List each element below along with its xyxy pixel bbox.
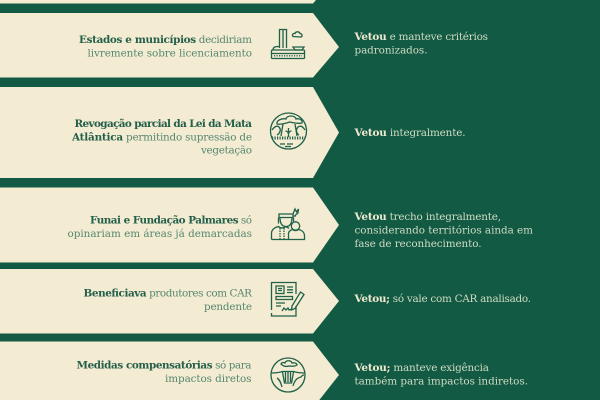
arrow panel (0, 87, 339, 178)
panel: CAR row (0, 269, 339, 334)
proposal text: livremente sobre licenciamento (88, 48, 252, 60)
response 3: Vetou trecho integralmente, (354, 211, 501, 223)
proposal text (71, 118, 252, 156)
proposal text: Beneficiava produtores com CAR (84, 288, 253, 300)
top strip: previous panel (0, 0, 316, 4)
proposal text (79, 34, 252, 60)
panel: Funai row (0, 188, 339, 262)
response 5: Vetou; manteve exigência (354, 362, 489, 374)
response 1 (354, 31, 488, 56)
proposal text: impactos diretos (165, 373, 252, 385)
proposal text: opinariam em áreas já demarcadas (68, 228, 252, 240)
proposal text: Funai e Fundação Palmares só (90, 214, 252, 226)
response 3: considerando territórios ainda em (354, 224, 533, 236)
response 3 (354, 211, 533, 250)
response 1: padronizados. (354, 44, 428, 56)
proposal text: Estados e municípios decidiriam (79, 34, 252, 46)
response 5: também para impactos indiretos. (354, 376, 528, 388)
panel: licensing row (0, 13, 339, 78)
response 2: Vetou integralmente. (354, 127, 466, 139)
icon: waterfall in circle (271, 358, 305, 392)
arrow panel (0, 342, 339, 400)
response 4: Vetou; só vale com CAR analisado. (354, 293, 531, 305)
arrow panel (0, 13, 339, 78)
icon: indigenous woman and child (272, 209, 304, 240)
icon: forest in circle (270, 113, 306, 149)
proposal text (84, 288, 253, 313)
proposal text: vegetação (200, 144, 252, 156)
response 3: fase de reconhecimento. (354, 238, 482, 250)
panel: compensatory measures row (0, 342, 339, 400)
proposal text (68, 214, 252, 240)
proposal text (76, 360, 252, 385)
arrow panel (0, 188, 339, 262)
proposal text: Medidas compensatórias só para (76, 360, 252, 372)
proposal text: pendente (204, 301, 252, 313)
veto responses column (354, 31, 533, 388)
arrow panel (0, 269, 339, 334)
response 5 (354, 362, 528, 388)
icon: signed document with pen (272, 282, 304, 316)
response 1: Vetou e manteve critérios (354, 31, 488, 43)
panel: Mata Atlantica row (0, 87, 339, 178)
proposal text: Atlântica permitindo supressão de (71, 132, 252, 144)
proposal text: Revogação parcial da Lei da Mata (74, 118, 252, 130)
icon: congress building (272, 30, 304, 58)
